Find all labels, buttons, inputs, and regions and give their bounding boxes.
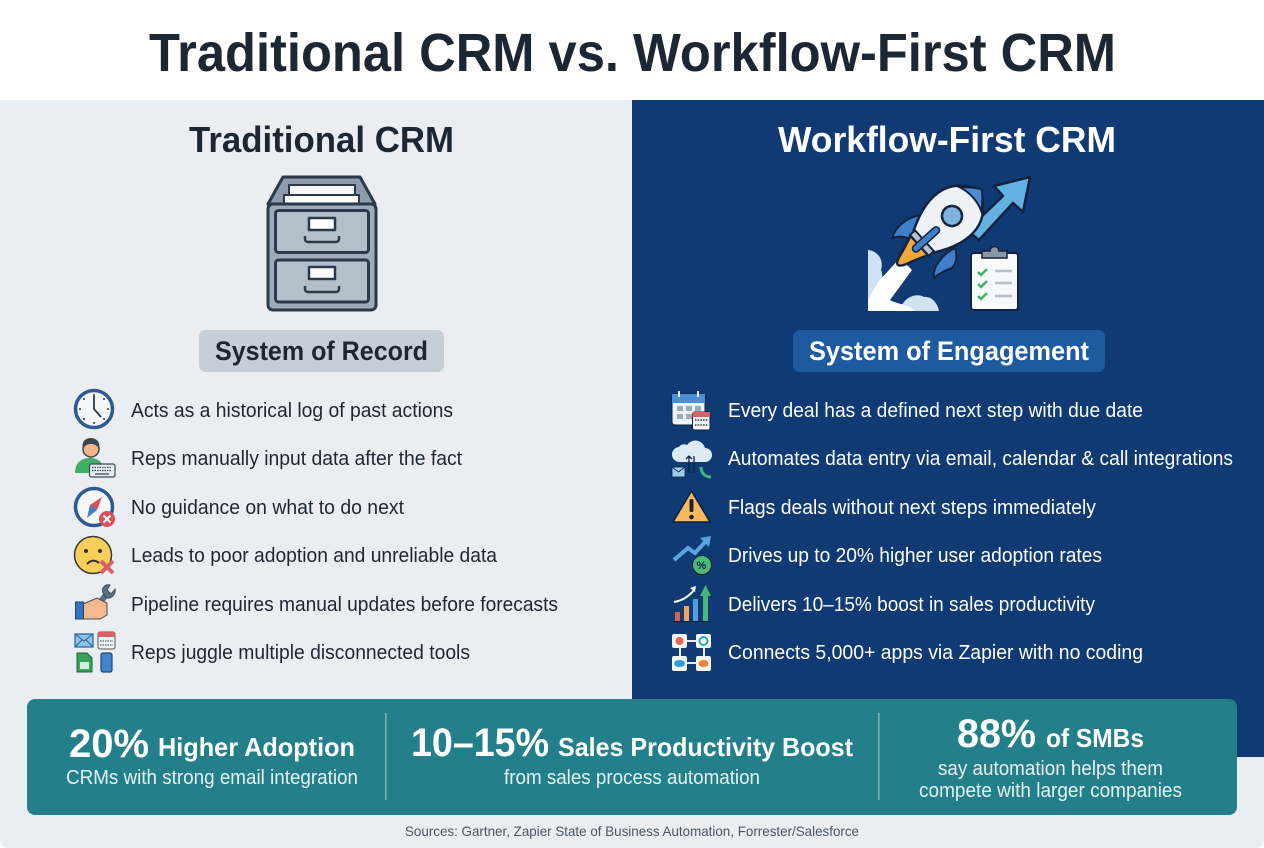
icon: exhaust cloud (868, 250, 939, 311)
stat: 10-15% productivity boost: 10–15% (411, 721, 549, 765)
stat: 10-15% productivity boost: from sales process automation (504, 767, 760, 789)
text: historical log: Acts as a historical log of past actions (131, 400, 453, 422)
panel: workflow-first CRM (632, 100, 1264, 757)
panel: stats bar (27, 699, 1237, 815)
text: automates data entry: Automates data entry via email, calendar & call integrations (728, 448, 1233, 470)
text: sales productivity: Delivers 10–15% boost in sales productivity (728, 594, 1095, 616)
text: multiple tools: Reps juggle multiple disconnected tools (131, 642, 470, 664)
stat: 10-15% productivity boost (411, 721, 853, 789)
text: manual input: Reps manually input data after the fact (131, 448, 462, 470)
stat: 88% of SMBs: of SMBs (1046, 723, 1144, 753)
badge: system of record (199, 330, 444, 372)
badge: system of engagement (793, 330, 1105, 372)
icon: rocket, arrow and checklist (868, 169, 1030, 311)
icon: person at keyboard (75, 438, 115, 477)
stat: 88% of SMBs: compete with larger companies (919, 780, 1182, 802)
heading: workflow-first CRM: Workflow-First CRM (778, 119, 1116, 160)
icon: connected apps (672, 634, 711, 671)
badge: system of engagement: System of Engagement (809, 336, 1089, 366)
stat: 20% higher adoption: CRMs with strong email integration (66, 767, 358, 789)
text: poor adoption: Leads to poor adoption and unreliable data (131, 545, 498, 567)
icon: sad face (74, 536, 113, 574)
stat: 20% higher adoption (66, 722, 358, 789)
icon: trend with percent (674, 536, 712, 574)
stat: 88% of SMBs: 88% (957, 712, 1036, 756)
icon: clipboard checklist (971, 246, 1018, 310)
icon: file cabinet (268, 177, 376, 310)
list: traditional CRM traits (74, 390, 558, 672)
icon: hand with wrench (76, 585, 115, 619)
icon: rocket (880, 169, 1000, 285)
text: pipeline updates: Pipeline requires manual updates before forecasts (131, 594, 558, 616)
icon: compass with error badge (76, 488, 115, 527)
text: higher adoption: Drives up to 20% higher user adoption rates (728, 545, 1102, 567)
sources footnote: Sources: Gartner, Zapier State of Business Automation, Forrester/Salesforce (405, 823, 859, 839)
text: flags deals: Flags deals without next steps immediately (728, 497, 1096, 519)
badge: system of record: System of Record (215, 336, 428, 366)
stat: 88% of SMBs (919, 712, 1182, 802)
icon: trend with percent: % (696, 560, 706, 572)
icon: clock (76, 390, 112, 428)
stat: 20% higher adoption: 20% (69, 722, 149, 766)
stat: 20% higher adoption: Higher Adoption (158, 732, 355, 762)
icon: warning triangle (673, 491, 710, 522)
icon: rising bars (673, 585, 711, 622)
title: Traditional CRM vs. Workflow-First CRM (149, 23, 1116, 83)
stat: 10-15% productivity boost: Sales Productivity Boost (558, 732, 853, 762)
heading: traditional CRM: Traditional CRM (189, 119, 454, 160)
icon: rising arrow (969, 177, 1030, 240)
icon: rocket fins (892, 215, 956, 278)
text: next step: Every deal has a defined next step with due date (728, 400, 1143, 422)
icon: cloud integrations (672, 441, 712, 477)
text: connects apps: Connects 5,000+ apps via Zapier with no coding (728, 642, 1143, 664)
list: workflow-first CRM traits (672, 391, 1233, 671)
icon: disconnected tools (75, 632, 115, 672)
stat: 88% of SMBs: say automation helps them (938, 758, 1163, 780)
icon: calendars (672, 391, 710, 430)
text: no guidance: No guidance on what to do next (131, 497, 404, 519)
